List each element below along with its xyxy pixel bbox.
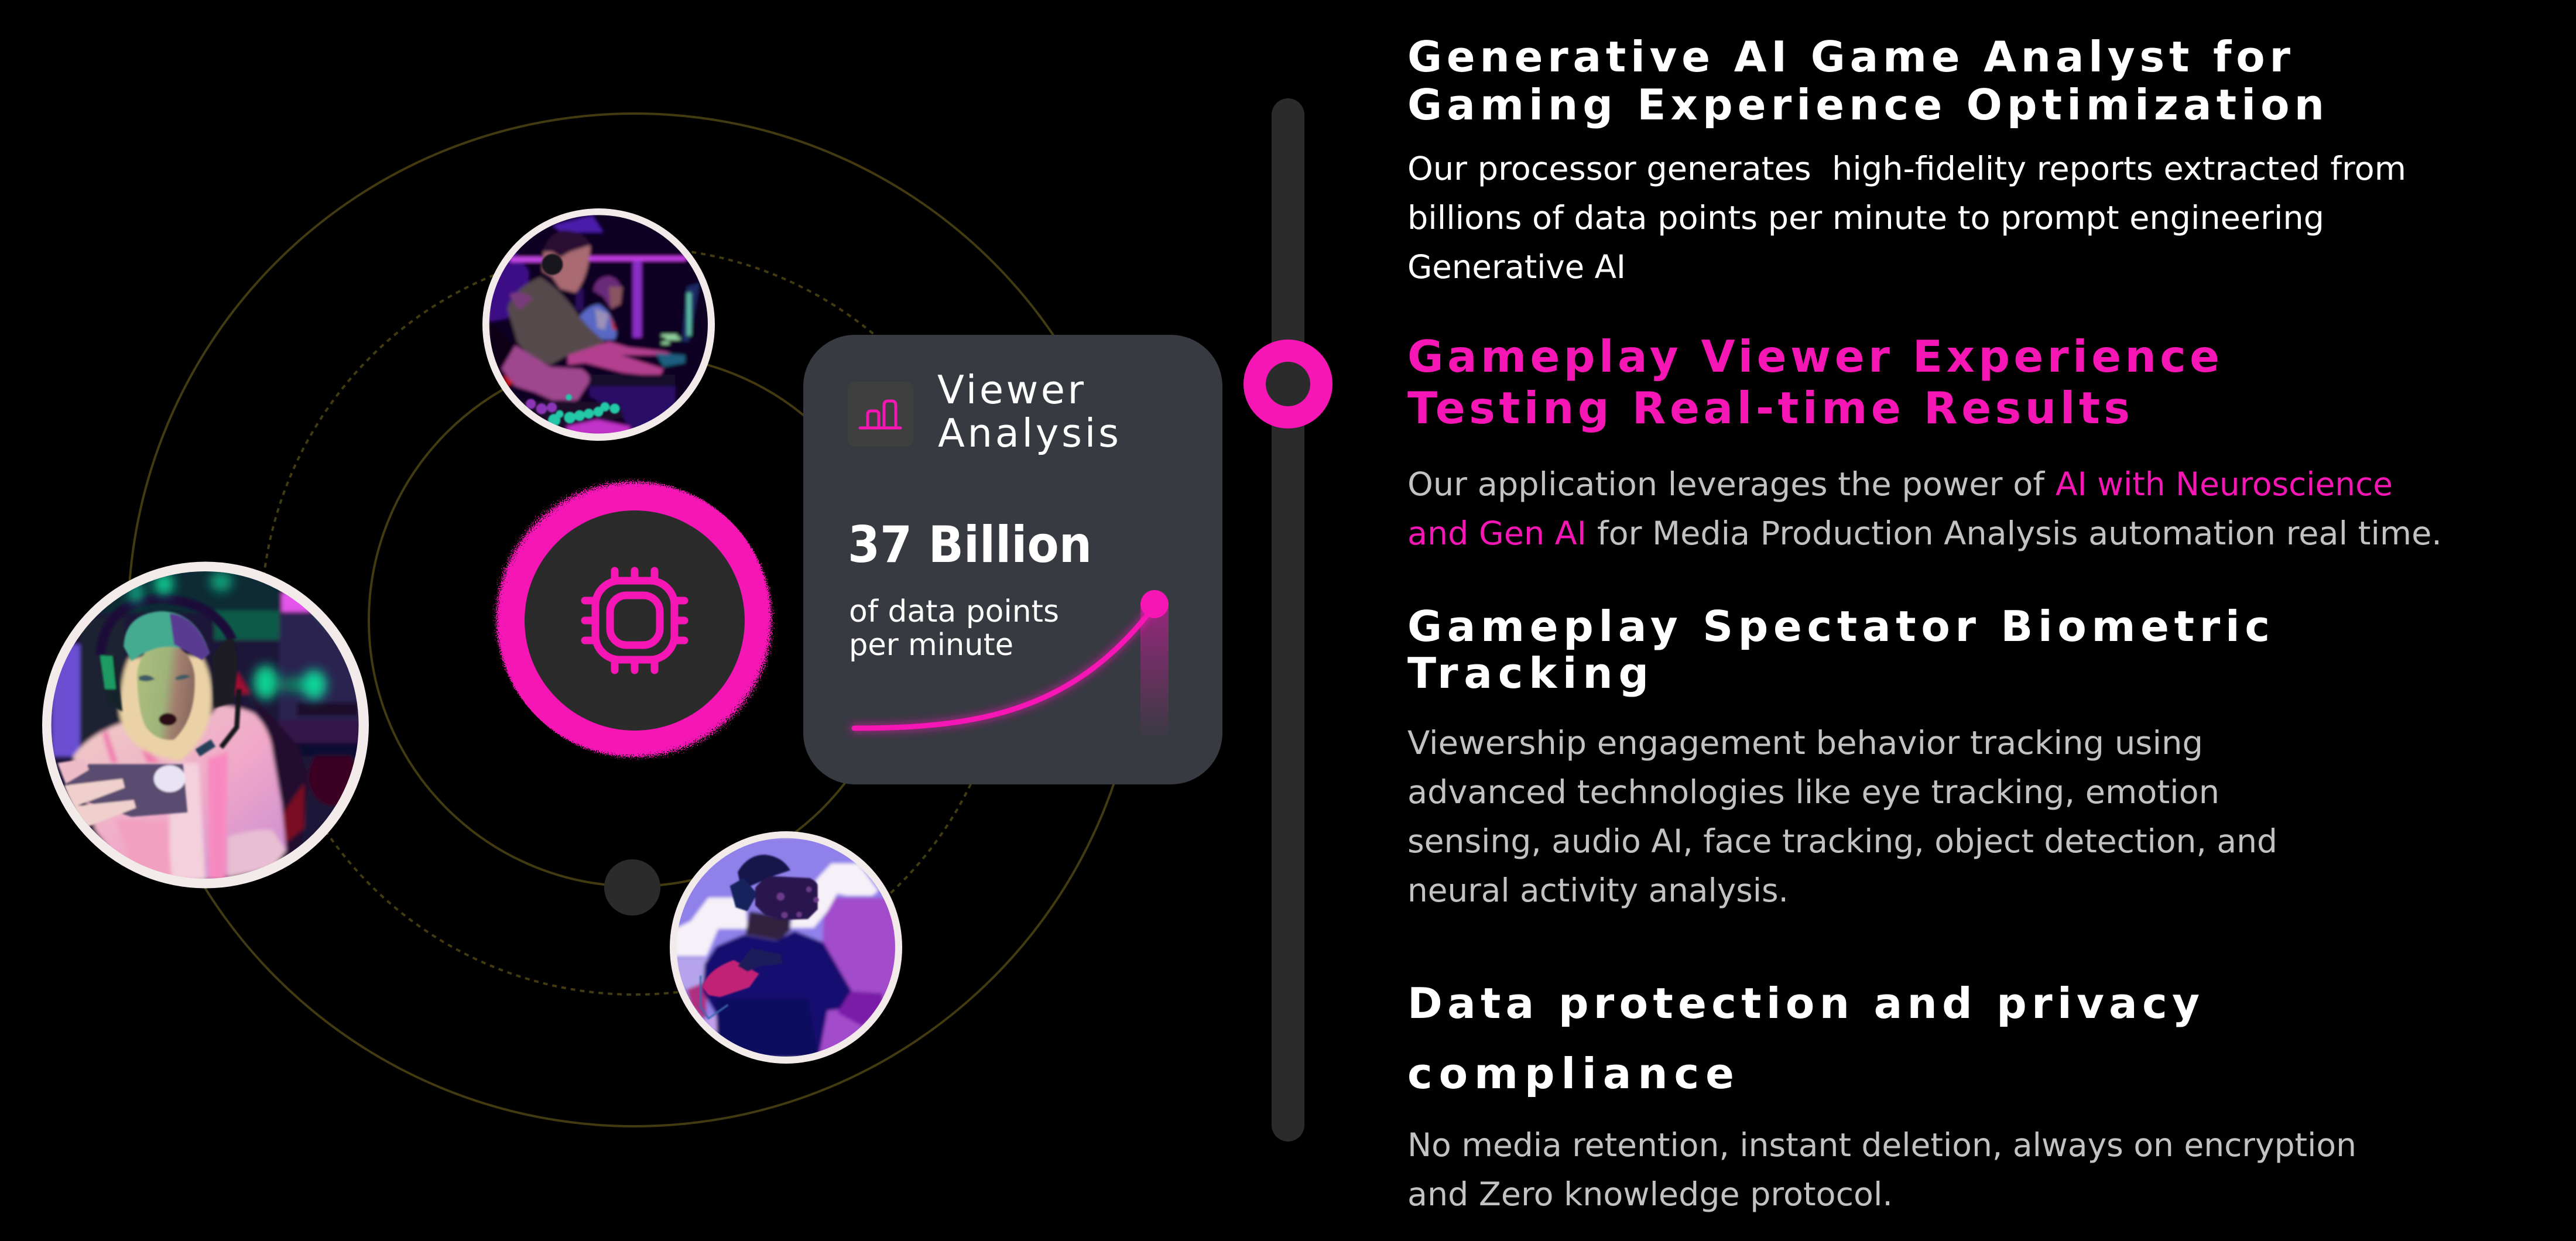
panel: viewer analysis card (803, 335, 1222, 784)
text block: application description: AI with Neuroscience (2056, 465, 2393, 503)
text block: application description: Our application leverages the power of (1407, 465, 2046, 503)
text block: viewership tracking description: advanced technologies like eye tracking, emotion (1407, 773, 2219, 811)
text block: processor description: Our processor generates high-fidelity reports extracted from (1407, 150, 2406, 187)
heading: gameplay spectator biometric tracking: Gameplay Spectator Biometric (1407, 602, 2270, 651)
heading: generative AI game analyst: Generative AI Game Analyst for (1407, 32, 2290, 81)
dark inner disc (525, 510, 745, 731)
central processor badge (496, 482, 772, 757)
timeline bar (1272, 98, 1304, 1141)
heading: data protection and privacy compliance (1407, 979, 2200, 1098)
text block: viewership tracking description: Viewership engagement behavior tracking using (1407, 724, 2203, 762)
text block: data protection description (1407, 1126, 2356, 1213)
heading: gameplay spectator biometric tracking (1407, 602, 2270, 698)
line chart (854, 590, 1169, 740)
heading: data protection and privacy compliance: compliance (1407, 1049, 1734, 1098)
text block: processor description: Generative AI (1407, 248, 1626, 286)
text block: processor description (1407, 150, 2406, 286)
text block: viewership tracking description (1407, 724, 2277, 909)
text block: viewership tracking description: neural activity analysis. (1407, 872, 1789, 909)
photo: esports players at keyboards (482, 208, 715, 441)
heading: gameplay viewer experience: Gameplay Viewer Experience (1407, 331, 2219, 382)
photo: surprised woman gamer with phone (42, 562, 369, 889)
pink noisy halo (496, 482, 772, 757)
small orbit node (604, 859, 660, 916)
timeline marker (1244, 340, 1332, 428)
heading: gameplay viewer experience (1407, 331, 2219, 434)
text block: viewership tracking description: sensing, audio AI, face tracking, object detection, and (1407, 822, 2277, 860)
text block: application description: and Gen AI (1407, 515, 1587, 552)
big number: 37 Billion (848, 516, 1092, 574)
heading: gameplay viewer experience: Testing Real-time Results (1407, 382, 2130, 434)
big number caption (849, 594, 1059, 663)
card title: Viewer (937, 367, 1084, 413)
text block: application description (1407, 465, 2442, 552)
heading: generative AI game analyst: Gaming Experience Optimization (1407, 80, 2324, 129)
text block: processor description: billions of data points per minute to prompt engineering (1407, 199, 2324, 236)
text block: data protection description: No media retention, instant deletion, always on encryption (1407, 1126, 2356, 1164)
card title: Analysis (938, 410, 1119, 456)
heading: gameplay spectator biometric tracking: Tracking (1407, 649, 1649, 698)
orbit rings (128, 114, 1141, 1126)
big number caption: per minute (849, 628, 1013, 663)
card title (937, 367, 1119, 456)
photo: man with VR headset (670, 831, 902, 1064)
icon: bar chart (848, 382, 913, 447)
icon: processor chip (585, 571, 684, 670)
heading: data protection and privacy compliance: Data protection and privacy (1407, 979, 2200, 1028)
heading: generative AI game analyst (1407, 32, 2324, 129)
text block: application description: for Media Production Analysis automation real time. (1597, 515, 2442, 552)
big number caption: of data points (849, 594, 1059, 629)
text block: data protection description: and Zero knowledge protocol. (1407, 1175, 1893, 1213)
